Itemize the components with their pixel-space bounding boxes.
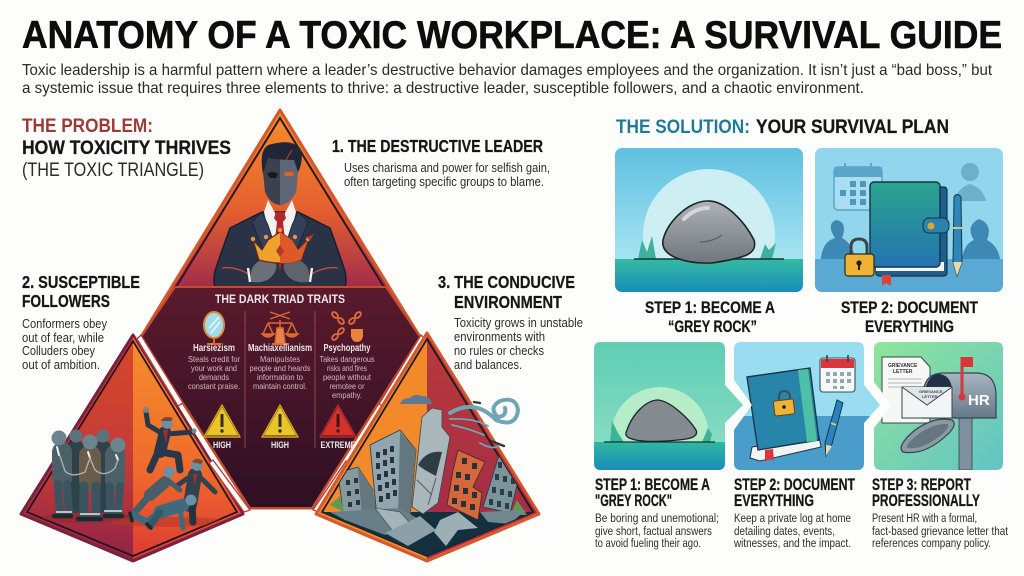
- trait: psychopathy: Psychopathy: [324, 343, 371, 354]
- panel: dark triad traits: [141, 287, 420, 508]
- intro paragraph: a systemic issue that requires three elements to thrive: a destructive leader, susceptible followers, and a chaotic environment.: [22, 80, 864, 97]
- icon: extreme warning: [320, 405, 356, 437]
- text: step 2 detail: EVERYTHING: [734, 492, 814, 510]
- left figure: [52, 452, 72, 478]
- label: step 2 overview: STEP 2: DOCUMENT: [841, 299, 978, 317]
- text: step 3 detail: PROFESSIONALLY: [872, 492, 980, 510]
- card: grey rock overview: [615, 148, 803, 301]
- text: step 2 detail: witnesses, and the impact.: [733, 536, 851, 550]
- icon: HR mailbox: [901, 357, 996, 470]
- text: conducive environment: environments with: [454, 330, 545, 344]
- icon: mirror: [204, 312, 224, 344]
- text: susceptible followers: Conformers obey: [22, 317, 108, 331]
- icon: calendar: [834, 163, 882, 210]
- label: step 1 overview: “GREY ROCK”: [668, 318, 757, 336]
- heading: the problem: THE PROBLEM:: [22, 116, 153, 137]
- icon: high warning: [204, 405, 240, 437]
- text: destructive leader: often targeting specific groups to blame.: [344, 175, 544, 189]
- icon: notebook: [870, 182, 949, 286]
- trait: psychopathy: [320, 311, 374, 451]
- label: step 2 overview: EVERYTHING: [865, 318, 954, 336]
- icon: HR mailbox: HR: [968, 392, 990, 409]
- panel: main toxic triangle with destructive leader: [141, 110, 420, 508]
- text: step 1 detail: give short, factual answers: [595, 524, 712, 538]
- text: step 2 detail: [733, 476, 855, 550]
- right figure: [105, 455, 125, 480]
- trait: narcissism: demands: [199, 372, 229, 382]
- back row: [68, 448, 84, 505]
- text: step 3 detail: STEP 3: REPORT: [872, 476, 971, 494]
- trait: narcissism: Harsiezism: [193, 343, 235, 354]
- icon: calendar: [820, 355, 855, 392]
- trait: machiavellianism: HIGH: [271, 440, 289, 451]
- label: step 2 overview: [841, 299, 978, 336]
- icon: rock: [626, 400, 697, 441]
- text: step 2 detail: STEP 2: DOCUMENT: [734, 476, 855, 494]
- text: susceptible followers: Colluders obey: [22, 344, 96, 358]
- card: document everything overview: [815, 148, 1003, 292]
- text: conducive environment: no rules or checks: [454, 344, 544, 358]
- trait: psychopathy: empathy.: [332, 390, 362, 400]
- icon: broken chains and mask: [331, 311, 363, 342]
- icon: grievance letter: GRIEVANCE: [888, 363, 918, 369]
- text: conducive environment: [438, 272, 583, 372]
- text: step 1 detail: to avoid fueling their ago.: [595, 536, 701, 550]
- icon: rock: [663, 201, 755, 263]
- icon: padlock: [845, 239, 874, 276]
- trait: machiavellianism: maintain control.: [253, 381, 307, 391]
- panel: conducive environment triangle: [316, 333, 539, 561]
- label: step 1 overview: [645, 299, 775, 336]
- icon: notebook with padlock: [747, 368, 821, 462]
- panel heading: THE DARK TRIAD TRAITS: [215, 293, 345, 306]
- text: step 3 detail: [872, 476, 1008, 550]
- illustration: chained conformers: [52, 430, 126, 519]
- illustration: tornado swirl: [450, 400, 518, 448]
- text: destructive leader: Uses charisma and power for selfish gain,: [344, 161, 550, 175]
- text: susceptible followers: out of fear, while: [22, 331, 104, 345]
- icon: HR mailbox: LETTER: [922, 394, 938, 399]
- crown: [253, 232, 308, 263]
- card: report professionally: [874, 342, 1003, 470]
- illustration: leader in suit holding crown: [214, 142, 346, 287]
- trait: narcissism: [188, 312, 240, 451]
- centre figure: [79, 456, 101, 480]
- trait: psychopathy: risks and fires: [327, 363, 367, 373]
- trait: psychopathy: people without: [323, 372, 372, 382]
- icon: HR mailbox: GRIEVANCE: [919, 389, 943, 394]
- heading: the problem: [22, 116, 231, 181]
- icon: scales and chess piece: [262, 312, 298, 344]
- trait: psychopathy: EXTREME: [320, 440, 356, 451]
- text: conducive environment: Toxicity grows in unstable: [454, 316, 583, 330]
- text: destructive leader: 1. THE DESTRUCTIVE LEADER: [332, 136, 543, 156]
- trait: machiavellianism: information to: [257, 372, 303, 382]
- text: step 2 detail: Keep a private log at home: [734, 511, 851, 525]
- label: step 1 overview: STEP 1: BECOME A: [645, 299, 775, 317]
- intro paragraph: [22, 62, 993, 97]
- heading: the solution: THE SOLUTION:: [616, 117, 750, 138]
- decorative stripes beside the triad panel: [137, 335, 425, 512]
- trait: psychopathy: Takes dangerous: [320, 354, 374, 364]
- text: susceptible followers: out of ambition.: [22, 358, 100, 372]
- illustration: collapsing city: [322, 395, 533, 560]
- heading: the solution: YOUR SURVIVAL PLAN: [756, 117, 949, 138]
- card: document everything: [734, 342, 880, 470]
- icon: grievance letter: LETTER: [893, 369, 913, 375]
- intro paragraph: Toxic leadership is a harmful pattern where a leader’s destructive behavior damages employees and the organization. It isn’t just a “bad boss,” but: [22, 62, 993, 79]
- text: susceptible followers: [22, 272, 140, 372]
- text: step 1 detail: Be boring and unemotional;: [595, 511, 719, 525]
- text: step 1 detail: STEP 1: BECOME A: [595, 476, 710, 494]
- heading: the problem: (THE TOXIC TRIANGLE): [22, 160, 204, 181]
- text: destructive leader: [332, 136, 550, 189]
- trait: narcissism: your work and: [191, 363, 237, 373]
- icon: grievance letter: [882, 357, 930, 423]
- trait: psychopathy: remotee or: [330, 381, 365, 391]
- hands: [250, 259, 277, 283]
- icon: pen: [953, 194, 962, 276]
- trait: machiavellianism: Manipulstes: [260, 354, 300, 364]
- text: susceptible followers: FOLLOWERS: [22, 291, 110, 311]
- icon: high warning: [262, 405, 298, 437]
- text: step 3 detail: references company policy.: [872, 536, 991, 550]
- trait: narcissism: constant praise.: [188, 381, 240, 391]
- icon: pen: [825, 400, 843, 456]
- text: susceptible followers: 2. SUSCEPTIBLE: [22, 272, 140, 292]
- card: grey rock: [594, 342, 743, 470]
- text: step 2 detail: detailing dates, events,: [734, 524, 835, 538]
- panel: susceptible followers triangle: [21, 335, 243, 561]
- text: step 1 detail: [595, 476, 719, 550]
- text: conducive environment: ENVIRONMENT: [454, 292, 562, 312]
- trait: machiavellianism: Machiaxellianism: [248, 343, 312, 354]
- trait: narcissism: Steals credit for: [188, 354, 240, 364]
- heading: the solution: [616, 117, 949, 138]
- text: step 1 detail: "GREY ROCK": [595, 492, 672, 510]
- text: step 3 detail: Present HR with a formal,: [872, 511, 977, 525]
- heading: the problem: HOW TOXICITY THRIVES: [22, 138, 231, 159]
- illustration: colluders climbing: [130, 407, 215, 528]
- trait: machiavellianism: [248, 312, 312, 451]
- text: conducive environment: and balances.: [454, 358, 522, 372]
- trait: machiavellianism: people and heards: [250, 363, 310, 373]
- text: conducive environment: 3. THE CONDUCIVE: [438, 272, 575, 292]
- trait: narcissism: HIGH: [213, 440, 231, 451]
